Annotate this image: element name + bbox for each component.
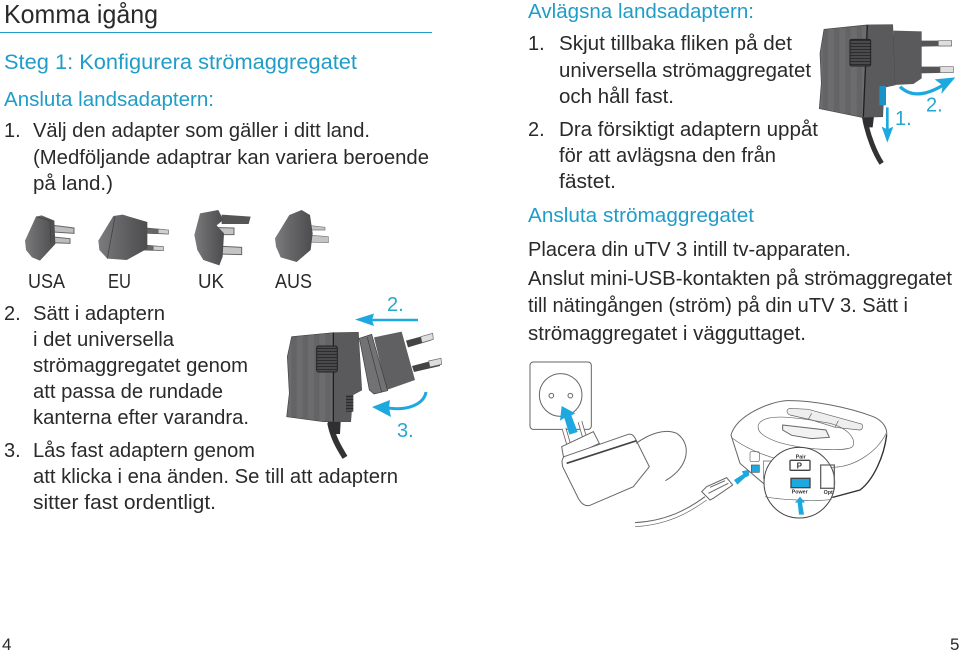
text block: removal instruction 1 bbox=[528, 33, 811, 108]
text block: instruction 3 bbox=[4, 440, 398, 514]
text block: instruction 3: 3. bbox=[4, 440, 21, 462]
plug bbox=[406, 334, 440, 372]
text block: removal instruction 1: universella strömaggregatet bbox=[559, 60, 811, 82]
text block: connect instructions bbox=[528, 268, 952, 345]
callout: magnified ports: Opt bbox=[824, 490, 833, 496]
arrow: plug into socket bbox=[560, 406, 578, 435]
icon: USB cable and connector bbox=[635, 469, 750, 527]
text block: removal instruction 1: och håll fast. bbox=[559, 86, 674, 108]
text block: instruction 2: att passa de rundade bbox=[33, 381, 223, 403]
text block: instruction 1: (Medföljande adaptrar kan variera beroende bbox=[33, 147, 429, 169]
text block: instruction 1: på land.) bbox=[33, 173, 113, 195]
text block: removal instruction 1: Skjut tillbaka fliken på det bbox=[559, 33, 792, 55]
text block: instruction 2: 2. bbox=[4, 303, 21, 325]
heading: remove adapter: Avlägsna landsadaptern: bbox=[528, 1, 754, 23]
text block: removal instruction 2: Dra försiktigt adaptern uppåt bbox=[559, 119, 818, 141]
subheading: connect country adapter: Ansluta landsadaptern: bbox=[4, 89, 214, 111]
text block: connect instructions: till nätingången (ström) på din uTV 3. Sätt i bbox=[528, 295, 908, 317]
text block: instruction 3: Lås fast adaptern genom bbox=[33, 440, 255, 462]
arrow: step 2 slide bbox=[355, 294, 418, 326]
text block: instruction 3: sitter fast ordentligt. bbox=[33, 492, 216, 514]
icon: EU adapter bbox=[98, 215, 168, 260]
connection diagram bbox=[530, 362, 887, 527]
heading: connect power adapter: Ansluta strömaggregatet bbox=[528, 205, 754, 227]
text block: removal instruction 2: för att avlägsna den från bbox=[559, 145, 776, 167]
text block: removal instruction 2: fästet. bbox=[559, 171, 616, 193]
country labels: EU bbox=[108, 271, 131, 293]
country labels: AUS bbox=[275, 271, 312, 293]
icon: AUS adapter bbox=[275, 210, 328, 262]
icon: UK adapter bbox=[194, 210, 251, 265]
text block: instruction 2: kanterna efter varandra. bbox=[33, 407, 249, 429]
arrow: step 2 slide: 2. bbox=[387, 294, 404, 316]
adapter illustrations bbox=[25, 210, 328, 265]
country labels: USA bbox=[28, 271, 66, 293]
text block: instruction 2: Sätt i adaptern bbox=[33, 303, 165, 325]
blue release tab bbox=[879, 86, 886, 105]
callout: magnified ports: P bbox=[797, 462, 803, 471]
icon: adapter removal diagram bbox=[819, 25, 955, 163]
text block: instruction 3: att klicka i ena änden. Se till att adaptern bbox=[33, 466, 398, 488]
icon: wall socket bbox=[530, 362, 591, 429]
text block: place uTV: Placera din uTV 3 intill tv-apparaten. bbox=[528, 239, 851, 261]
country labels bbox=[28, 271, 312, 293]
arrow: step 3 rotate: 3. bbox=[397, 420, 414, 442]
page number right: 5 bbox=[950, 635, 959, 654]
text block: instruction 2 bbox=[4, 303, 249, 429]
arrow: step 2 curved up: 2. bbox=[926, 95, 943, 117]
text block: instruction 1: 1. bbox=[4, 120, 21, 142]
text block: connect instructions: Anslut mini-USB-kontakten på strömaggregatet bbox=[528, 268, 952, 290]
text block: instruction 1 bbox=[4, 120, 429, 195]
callout: magnified ports bbox=[764, 447, 835, 518]
icon: power adapter with cable bbox=[562, 422, 686, 506]
icon: universal power adapter with EU plug bbox=[287, 332, 442, 457]
page number left: 4 bbox=[2, 635, 11, 654]
text block: instruction 2: i det universella bbox=[33, 329, 175, 351]
callout: magnified ports: Pair bbox=[796, 454, 806, 460]
text block: removal instruction 1: 1. bbox=[528, 33, 545, 55]
text block: removal instruction 2: 2. bbox=[528, 119, 545, 141]
country labels: UK bbox=[198, 271, 225, 293]
callout: magnified ports: Power bbox=[792, 490, 808, 496]
text block: instruction 1: Välj den adapter som gäller i ditt land. bbox=[33, 120, 370, 142]
heading: step 1: Steg 1: Konfigurera strömaggregatet bbox=[4, 51, 357, 74]
arrow: step 3 rotate bbox=[372, 392, 426, 442]
text block: removal instruction 2 bbox=[528, 119, 818, 193]
icon: uTV dock bbox=[731, 401, 887, 497]
text block: connect instructions: strömaggregatet i vägguttaget. bbox=[528, 323, 806, 345]
arrow: step 1 down: 1. bbox=[895, 108, 912, 130]
text block: instruction 2: strömaggregatet genom bbox=[33, 355, 248, 377]
icon: USA adapter bbox=[25, 215, 74, 261]
